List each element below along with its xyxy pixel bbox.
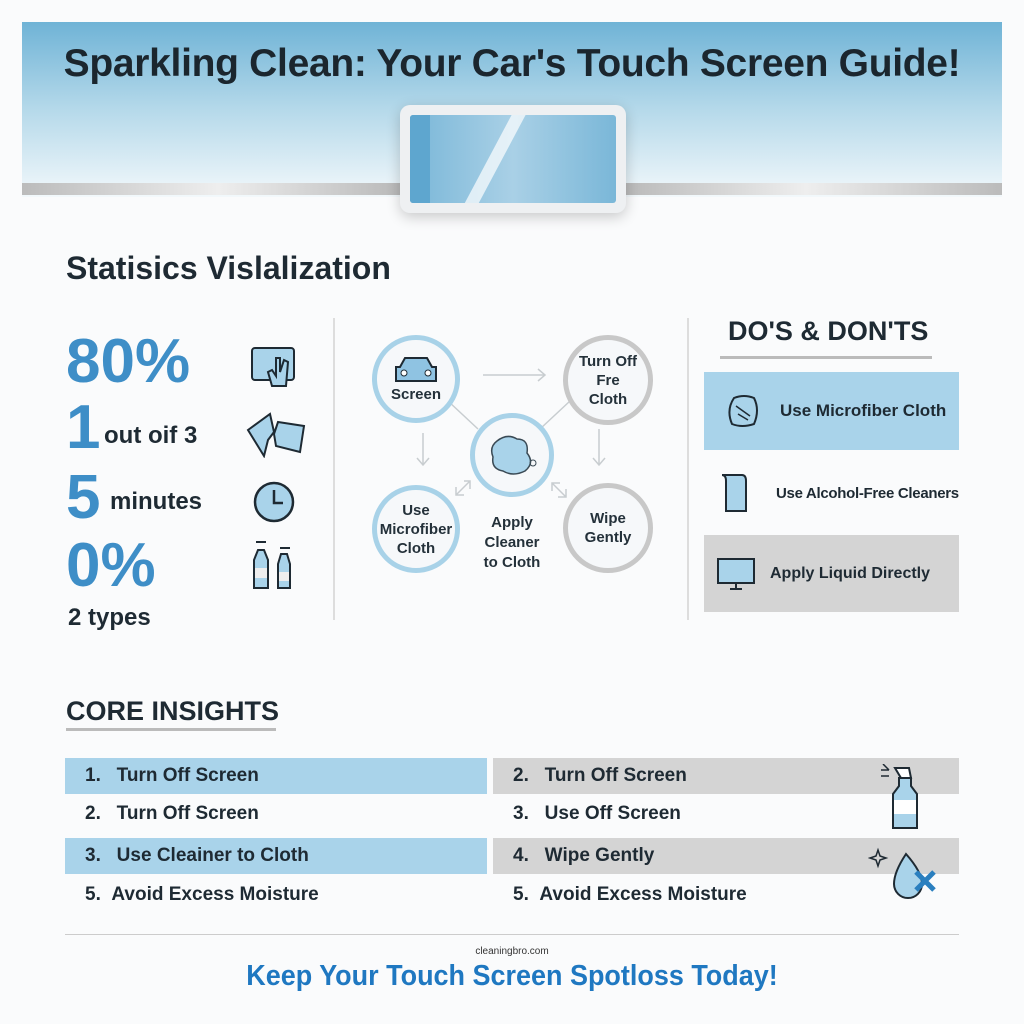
- list: core insights left: 5. Avoid Excess Moisture: [85, 884, 319, 905]
- stat 5 minutes: 5: [66, 463, 100, 532]
- stat 80%: 80%: [66, 327, 190, 396]
- divider: [333, 318, 335, 620]
- list: core insights left: 2. Turn Off Screen: [85, 803, 259, 824]
- icon: spray bottles: [253, 541, 291, 589]
- node: screen: Screen: [391, 386, 441, 402]
- node: wipe gently: Wipe: [590, 510, 626, 527]
- item: microfiber: [704, 372, 959, 450]
- gray dash strip: [22, 183, 1002, 195]
- node: screen: [372, 335, 460, 423]
- label: apply cleaner: to Cloth: [484, 554, 540, 571]
- item: alcohol free: [722, 474, 959, 512]
- list: core insights right: 4. Wipe Gently: [513, 845, 654, 866]
- panel: stats: [66, 327, 306, 631]
- node: use microfiber: Use: [402, 502, 430, 518]
- node: use microfiber: Microfiber: [380, 520, 452, 538]
- list: core insights right: 5. Avoid Excess Moisture: [513, 884, 747, 905]
- stat 0%: 0%: [66, 531, 156, 600]
- heading: core insights: CORE INSIGHTS: [66, 696, 279, 726]
- list: core insights right: 2. Turn Off Screen: [513, 765, 687, 786]
- list: core insights left: [65, 758, 487, 905]
- stat 2 types: 2 types: [68, 604, 151, 631]
- icon: drop with x: [868, 848, 936, 899]
- item: apply liquid directly: Apply Liquid Directly: [770, 564, 930, 582]
- icon: hand touch: [251, 347, 295, 387]
- node: turn off: [563, 335, 653, 425]
- node: wipe gently: Gently: [585, 529, 631, 546]
- label: apply cleaner: Cleaner: [484, 534, 540, 551]
- node: turn off: Cloth: [589, 390, 627, 408]
- node: wipe gently: [563, 483, 653, 573]
- list: core insights right: [493, 758, 959, 905]
- node: use microfiber: Cloth: [397, 540, 435, 556]
- list: core insights right: 3. Use Off Screen: [513, 803, 681, 824]
- node: use microfiber: [372, 485, 460, 573]
- item: apply liquid directly: [704, 535, 959, 612]
- label: apply cleaner: [484, 514, 540, 571]
- node: turn off: Turn Off: [579, 352, 637, 370]
- header banner: [22, 22, 1002, 197]
- icon: touch screen device: [400, 105, 626, 213]
- node: center cleaner cloth: [470, 413, 554, 497]
- item: microfiber: Use Microfiber Cloth: [780, 401, 946, 420]
- icon: spray bottle: [881, 764, 918, 829]
- icon: clock: [254, 482, 294, 522]
- stat 1 out of 3: 1: [66, 393, 100, 462]
- divider: [65, 934, 959, 935]
- footer: tagline: Keep Your Touch Screen Spotloss Today!: [246, 960, 778, 992]
- item: alcohol free: Use Alcohol-Free Cleaners: [776, 484, 959, 502]
- node: turn off: Fre: [596, 372, 620, 388]
- label: apply cleaner: Apply: [491, 514, 533, 531]
- chart: process flow: [372, 335, 653, 573]
- title: Sparkling Clean: Your Car's Touch Screen Guide!: [64, 42, 960, 85]
- footer: source: cleaningbro.com: [475, 946, 549, 957]
- panel: dos and donts: [704, 316, 959, 612]
- list: core insights left: 1. Turn Off Screen: [85, 765, 259, 786]
- list: core insights left: 3. Use Cleainer to Cloth: [85, 845, 309, 866]
- panel: stats: minutes: [110, 488, 202, 515]
- heading: dos donts: DO'S & DON'TS: [728, 316, 928, 346]
- icon: cracked screen: [246, 412, 306, 458]
- heading: statistics: Statisics Vislalization: [66, 250, 391, 286]
- panel: stats: out oif 3: [104, 422, 197, 449]
